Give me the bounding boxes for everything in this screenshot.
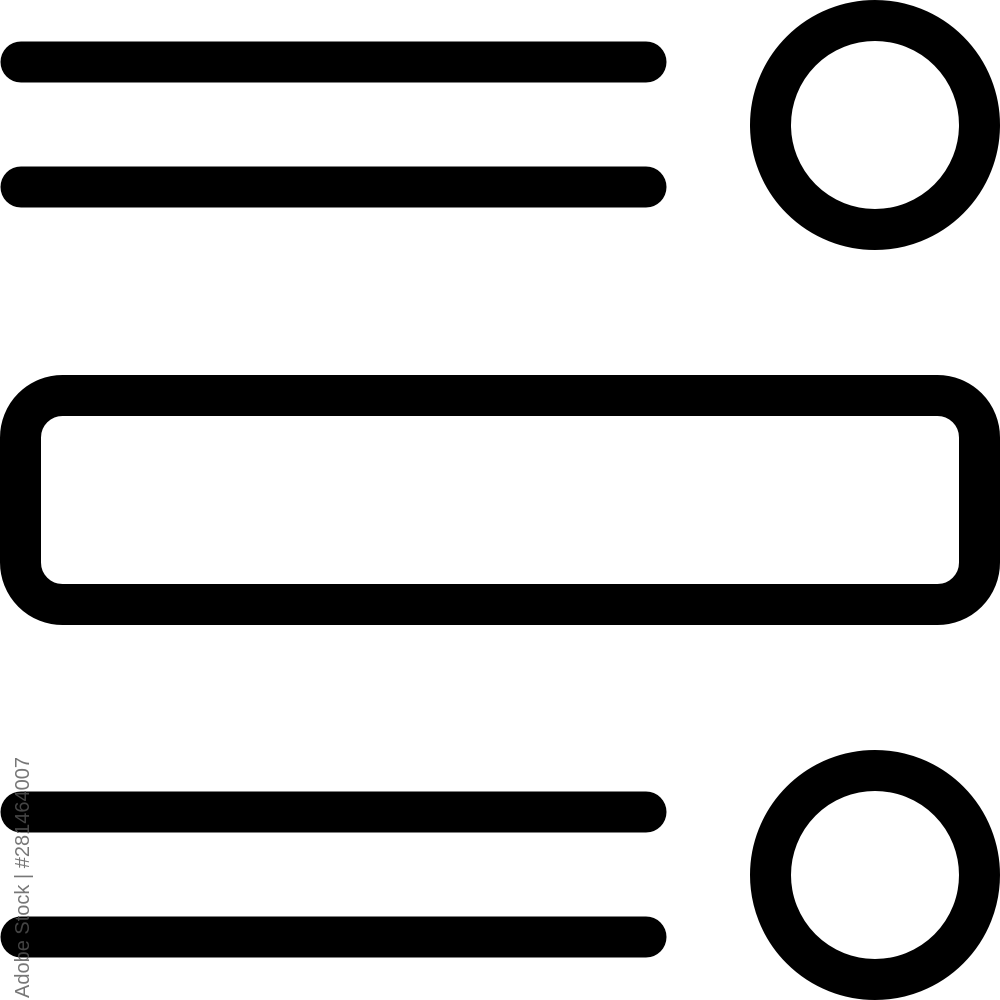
top circle <box>770 20 980 230</box>
top line 1 <box>21 42 646 82</box>
middle rounded rectangle <box>20 396 980 604</box>
watermark text: Adobe Stock | #281464007 <box>12 757 34 998</box>
bottom line 2 <box>21 916 646 958</box>
bottom line 1 <box>21 792 646 832</box>
bottom circle <box>770 770 980 980</box>
top line 2 <box>21 166 646 208</box>
